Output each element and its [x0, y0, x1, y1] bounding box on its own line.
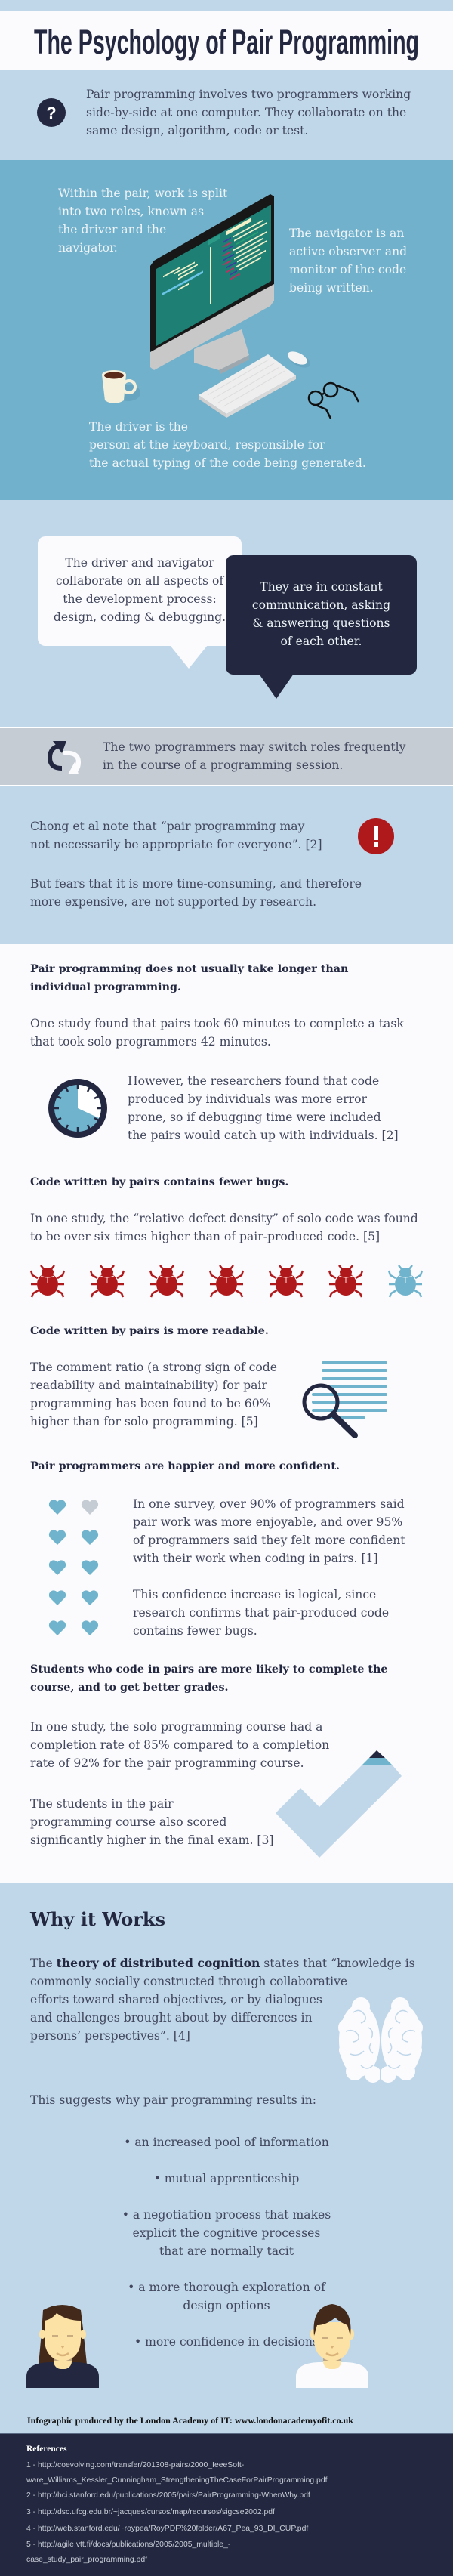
text: navigator — [289, 227, 407, 295]
text: comment ratio — [30, 1361, 277, 1429]
text: however: However, the researchers found that code — [128, 1074, 379, 1088]
text: switch roles: The two programmers may switch roles frequently — [103, 740, 405, 754]
list: results: that are normally tacit — [159, 2244, 294, 2258]
intro text: Pair programming involves two programmers working — [86, 88, 411, 101]
bubble: white: The driver and navigator — [65, 556, 214, 570]
text: survey: In one survey, over 90% of programmers said — [133, 1497, 405, 1511]
bubble: dark: They are in constant — [260, 580, 383, 594]
list: results: • mutual apprenticeship — [154, 2172, 299, 2185]
text: suggests: This suggests why pair programming results in: — [30, 2093, 316, 2107]
icon: exclamation — [358, 818, 394, 854]
text: roles: the driver and the — [58, 223, 166, 236]
list: results: • a more thorough exploration of — [128, 2281, 325, 2294]
text: distributed cognition: The theory of distributed cognition states that “knowledge is — [30, 1956, 415, 1970]
text: exam: programming course also scored — [30, 1815, 226, 1829]
text: survey: with their work when coding in pairs. [1] — [133, 1552, 378, 1565]
text: roles: into two roles, known as — [58, 205, 204, 218]
icon: clock — [48, 1079, 107, 1138]
heading: time: individual programming. — [30, 981, 181, 993]
heading: bugs: Code written by pairs contains fewer bugs. — [30, 1176, 288, 1188]
text: completion — [30, 1720, 329, 1770]
text: study time — [30, 1017, 404, 1049]
text: driver: person at the keyboard, responsible for — [89, 438, 325, 452]
text: defect density: In one study, the “relative defect density” of solo code was found — [30, 1212, 418, 1225]
text: driver: The driver is the — [89, 420, 188, 434]
text: confidence: This confidence increase is logical, since — [133, 1588, 376, 1602]
text: navigator: active observer and — [289, 245, 407, 258]
text: fears — [30, 877, 362, 909]
text: switch roles — [103, 740, 406, 772]
bubble: white — [38, 536, 242, 646]
text: however: produced by individuals was more error — [128, 1092, 367, 1106]
text: roles — [58, 187, 228, 255]
text: roles: navigator. — [58, 241, 118, 255]
bubble: dark: communication, asking — [252, 598, 390, 612]
heading: happier: Pair programmers are happier and more confident. — [30, 1460, 340, 1472]
icon: brain — [338, 1997, 423, 2083]
intro text: same design, algorithm, code or test. — [86, 124, 308, 137]
text: completion: completion rate of 85% compared to a completion — [30, 1738, 329, 1752]
list: results: explicit the cognitive processes — [133, 2226, 320, 2240]
credit: Infographic produced by the London Academy of IT: www.londonacademyofit.co.uk — [27, 2415, 353, 2426]
intro text: side-by-side at one computer. They collaborate on the — [86, 106, 406, 119]
text: however: the pairs would catch up with individuals. [2] — [128, 1129, 399, 1142]
text: Chong — [30, 820, 322, 851]
text: roles: Within the pair, work is split — [58, 187, 227, 200]
text: comment ratio: programming has been found to be 60% — [30, 1397, 270, 1410]
heading: students: course, and to get better grades. — [30, 1682, 229, 1694]
heading: students — [30, 1663, 388, 1694]
text: completion: In one study, the solo programming course had a — [30, 1720, 322, 1734]
text: distributed cognition: persons’ perspectives”. [4] — [30, 2029, 190, 2043]
footer: references: 4 - http://web.stanford.edu/~roypea/RoyPDF%20folder/A67_Pea_93_DI_CUP.pdf — [26, 2525, 308, 2533]
text: distributed cognition: efforts toward shared objectives, or by dialogues — [30, 1993, 322, 2006]
text: exam: The students in the pair — [30, 1797, 174, 1811]
icon: checkmark — [276, 1750, 402, 1858]
icon: question mark: ? — [46, 103, 57, 122]
heading: why it works: Why it Works — [30, 1908, 165, 1930]
text: driver: the actual typing of the code being generated. — [89, 456, 366, 470]
bubble: dark: of each other. — [281, 635, 362, 648]
list: results: design options — [183, 2299, 270, 2312]
illustration: desk with computer — [102, 194, 359, 419]
icon grid: hearts — [48, 1500, 98, 1635]
text: confidence: research confirms that pair-produced code — [133, 1606, 389, 1620]
text: completion: rate of 92% for the pair programming course. — [30, 1756, 304, 1770]
heading: time: Pair programming does not usually take longer than — [30, 963, 348, 975]
footer: references: ware_Williams_Kessler_Cunningham_StrengtheningTheCaseForPairProgramming.pdf — [26, 2476, 328, 2484]
footer: references: 3 - http://dsc.ufcg.edu.br/~jacques/cursos/map/recursos/sigcse2002.pdf — [26, 2508, 275, 2516]
text: however: prone, so if debugging time were included — [128, 1110, 381, 1124]
icon: swap arrows — [48, 741, 81, 774]
avatar: man — [296, 2304, 368, 2388]
text: navigator: The navigator is an — [289, 227, 404, 240]
text: switch roles: in the course of a programming session. — [103, 758, 343, 772]
text: fears: more expensive, are not supported by research. — [30, 895, 316, 909]
bubble: white: the development process: — [63, 592, 217, 606]
text: fears: But fears that it is more time-consuming, and therefore — [30, 877, 362, 891]
icon: question mark — [37, 98, 66, 127]
heading: students: Students who code in pairs are more likely to complete the — [30, 1663, 388, 1676]
text: defect density — [30, 1212, 418, 1243]
text: survey — [133, 1497, 405, 1565]
text: navigator: monitor of the code — [289, 263, 406, 276]
text: survey: pair work was more enjoyable, and over 95% — [133, 1515, 402, 1529]
text: distributed cognition: commonly socially constructed through collaborative — [30, 1975, 347, 1988]
icon row: bugs — [30, 1265, 423, 1298]
text: however — [128, 1074, 399, 1142]
text: defect density: to be over six times higher than of pair-produced code. [5] — [30, 1230, 380, 1243]
bubble: white: collaborate on all aspects of — [56, 574, 223, 588]
text: comment ratio: The comment ratio (a strong sign of code — [30, 1361, 277, 1374]
text: confidence: contains fewer bugs. — [133, 1624, 257, 1638]
footer: references: 1 - http://coevolving.com/transfer/201308-pairs/2000_IeeeSoft- — [26, 2461, 244, 2469]
footer: references: References — [26, 2445, 66, 2454]
list: results: • more confidence in decisions — [134, 2335, 319, 2349]
text: navigator: being written. — [289, 281, 374, 295]
bubble: dark: & answering questions — [252, 616, 390, 630]
list: results: • an increased pool of information — [124, 2136, 329, 2149]
text: driver — [89, 420, 366, 470]
intro text — [86, 88, 411, 137]
text: exam: significantly higher in the final exam. [3] — [30, 1833, 273, 1847]
text: study time: that took solo programmers 42 minutes. — [30, 1035, 271, 1049]
text: distributed cognition: and challenges brought about by differences in — [30, 2011, 313, 2025]
text: distributed cognition — [30, 1956, 415, 2043]
bubble: white: design, coding & debugging. — [54, 610, 226, 624]
footer: references: 5 - http://agile.vtt.fi/docs/publications/2005/2005_multiple_- — [26, 2540, 230, 2549]
text: exam — [30, 1797, 273, 1847]
avatar: woman — [26, 2305, 99, 2388]
text: comment ratio: readability and maintainability) for pair — [30, 1379, 267, 1392]
footer: references: case_study_pair_programming.pdf — [26, 2555, 147, 2564]
footer: references — [26, 2445, 328, 2564]
text: comment ratio: higher than for solo programming. [5] — [30, 1415, 258, 1429]
bubble: dark — [226, 555, 417, 675]
list: results — [122, 2136, 331, 2349]
text: confidence — [133, 1588, 389, 1638]
text: Chong: Chong et al note that “pair programming may — [30, 820, 304, 833]
heading: time — [30, 963, 349, 993]
text: Chong: not necessarily be appropriate for everyone”. [2] — [30, 838, 322, 851]
heading: readable: Code written by pairs is more readable. — [30, 1325, 269, 1337]
icon: document with magnifier — [302, 1361, 387, 1438]
footer: references: 2 - http://hci.stanford.edu/publications/2005/pairs/PairProgramming-WhenWhy.pdf — [26, 2491, 310, 2500]
text: study time: One study found that pairs took 60 minutes to complete a task — [30, 1017, 404, 1030]
text: survey: of programmers said they felt more confident — [133, 1534, 405, 1547]
list: results: • a negotiation process that makes — [122, 2208, 331, 2222]
